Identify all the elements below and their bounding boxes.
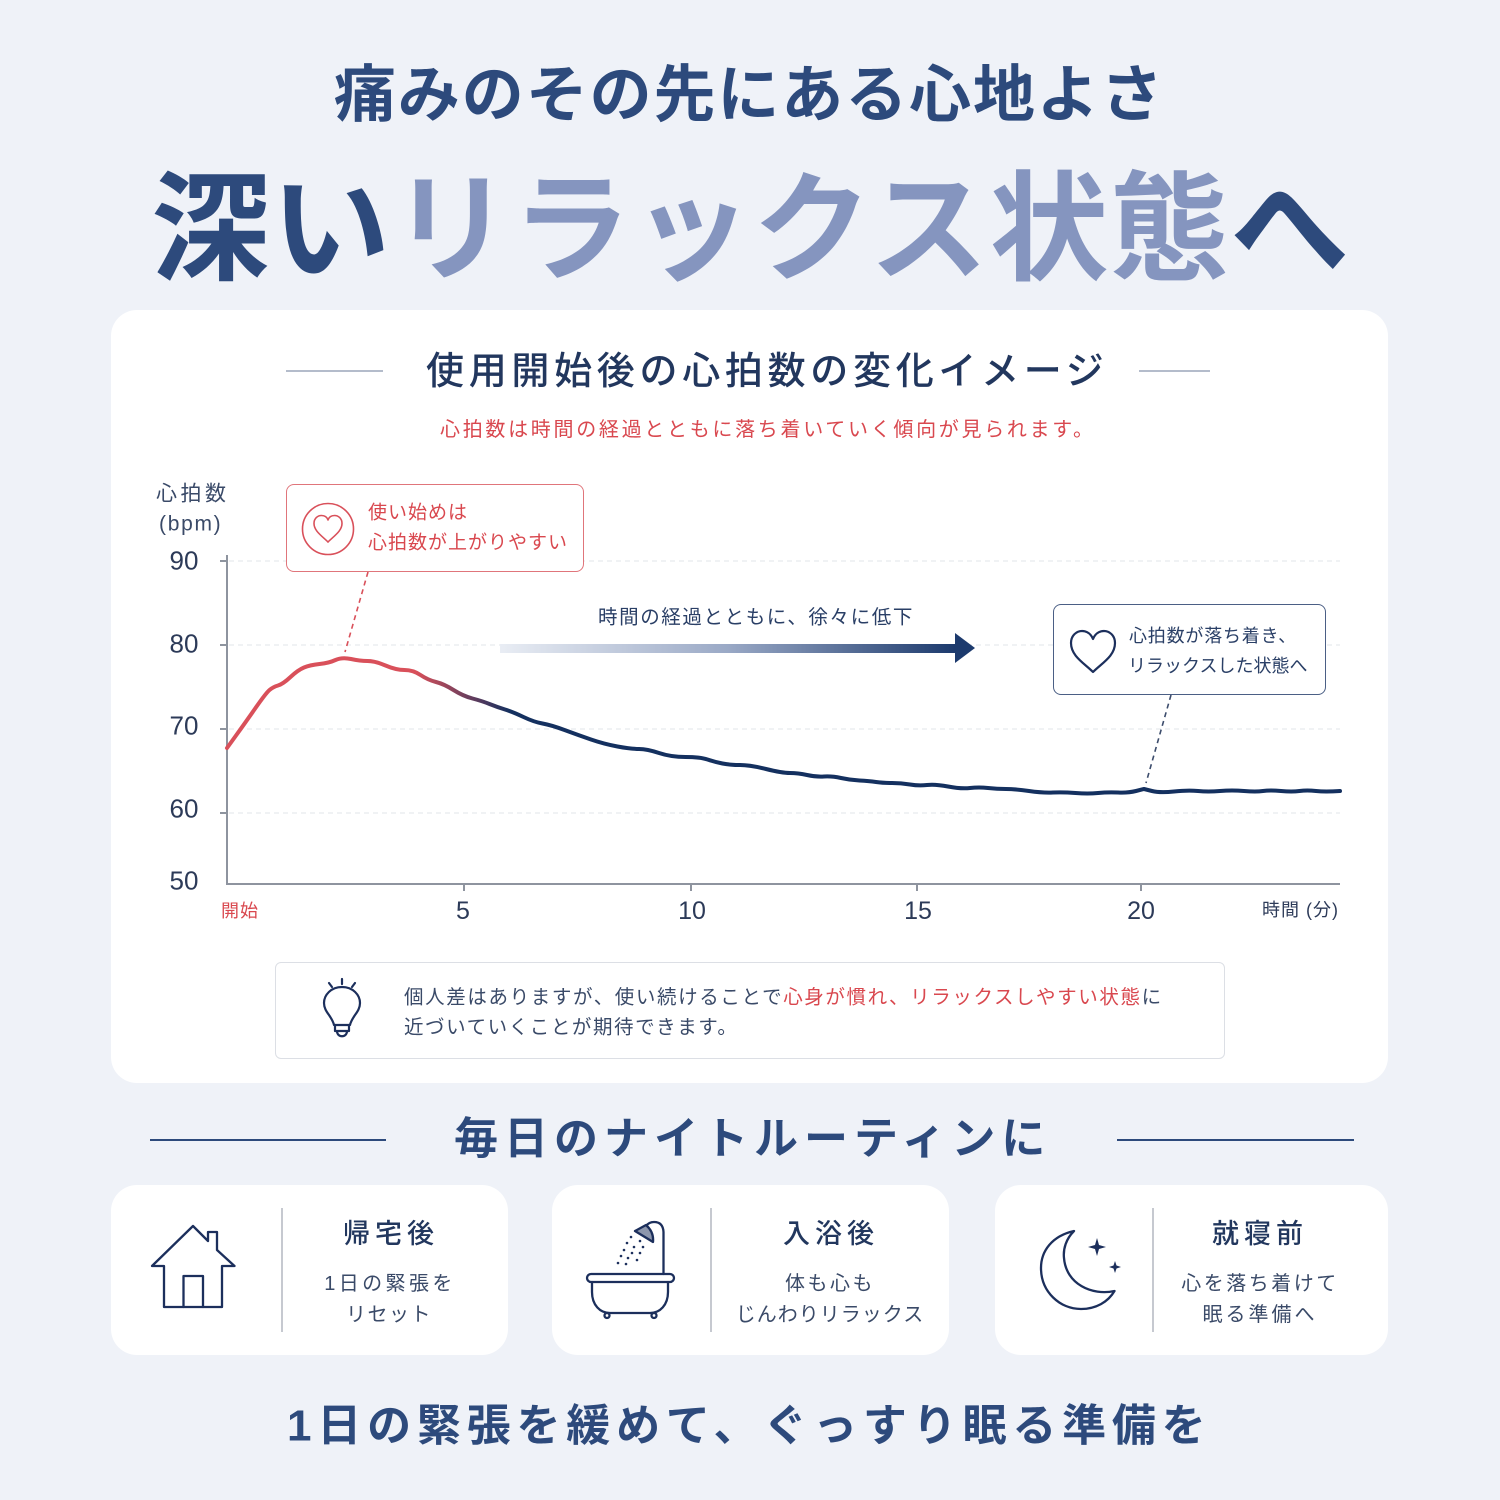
arrow label: 時間の経過とともに、徐々に低下 <box>598 606 914 628</box>
note box <box>275 962 1225 1059</box>
callout: relaxed <box>1053 604 1326 695</box>
section rule left <box>150 1139 386 1141</box>
x tick labels: 開始 <box>221 901 259 921</box>
card: before bed <box>995 1185 1388 1355</box>
footer message: 1日の緊張を緩めて、ぐっすり眠る準備を <box>287 1402 1211 1451</box>
y tick labels <box>170 545 198 895</box>
y tick labels: 90 <box>170 545 198 575</box>
card: after bath: じんわりリラックス <box>736 1304 924 1326</box>
divider <box>710 1208 712 1332</box>
icon: heart in circle <box>302 502 354 556</box>
card: after coming home <box>111 1185 508 1355</box>
callout text: 使い始めは <box>368 503 468 524</box>
divider <box>1152 1208 1154 1332</box>
title: line 2: 深いリラックス状態へ <box>151 164 1350 297</box>
y axis unit: (bpm) <box>159 512 222 535</box>
divider <box>281 1208 283 1332</box>
section rule right <box>1117 1139 1354 1141</box>
note text: 個人差はありますが、使い続けることで心身が慣れ、リラックスしやすい状態に <box>404 986 1163 1008</box>
chart heading rule right <box>1139 370 1210 372</box>
section heading: 毎日のナイトルーティンに <box>454 1115 1051 1164</box>
icon: heart <box>1070 630 1116 674</box>
x tick labels: 時間 (分) <box>1262 900 1339 920</box>
callout: start: 心拍数が上がりやすい <box>368 533 568 554</box>
y tick labels: 80 <box>170 628 198 658</box>
y tick labels: 70 <box>170 710 198 740</box>
card title: 就寝前 <box>1212 1219 1308 1249</box>
card title: 帰宅後 <box>343 1219 439 1249</box>
icon: light bulb <box>322 978 362 1038</box>
icon: bath with shower <box>586 1220 676 1320</box>
y axis title: 心拍数 <box>156 482 230 505</box>
chart heading rule left <box>286 370 383 372</box>
card text: 体も心も <box>785 1273 875 1295</box>
x tick labels: 10 <box>678 897 706 925</box>
card: after bath <box>552 1185 949 1355</box>
icon: moon and stars <box>1040 1230 1121 1310</box>
chart heading: 使用開始後の心拍数の変化イメージ <box>426 351 1108 393</box>
chart subtitle: 心拍数は時間の経過とともに落ち着いていく傾向が見られます。 <box>440 419 1096 441</box>
note box: 近づいていくことが期待できます。 <box>404 1016 738 1038</box>
title: line 1: 痛みのその先にある心地よさ <box>334 61 1165 130</box>
x tick labels <box>221 897 1339 925</box>
callout: relaxed: リラックスした状態へ <box>1128 656 1307 676</box>
card title: 入浴後 <box>783 1219 879 1249</box>
card: after coming home: リセット <box>346 1304 432 1326</box>
x tick labels: 15 <box>904 897 932 925</box>
y tick labels: 50 <box>170 865 198 895</box>
x tick labels: 5 <box>456 897 470 925</box>
x tick labels: 20 <box>1127 897 1155 925</box>
callout: start <box>286 484 584 572</box>
card text: 心を落ち着けて <box>1181 1273 1339 1295</box>
callout text: 心拍数が落ち着き、 <box>1129 626 1297 646</box>
icon: house <box>150 1224 236 1308</box>
card: before bed: 眠る準備へ <box>1202 1304 1318 1326</box>
y tick labels: 60 <box>170 793 198 823</box>
card text: 1日の緊張を <box>324 1273 456 1295</box>
panel: heart rate chart <box>111 310 1388 1083</box>
